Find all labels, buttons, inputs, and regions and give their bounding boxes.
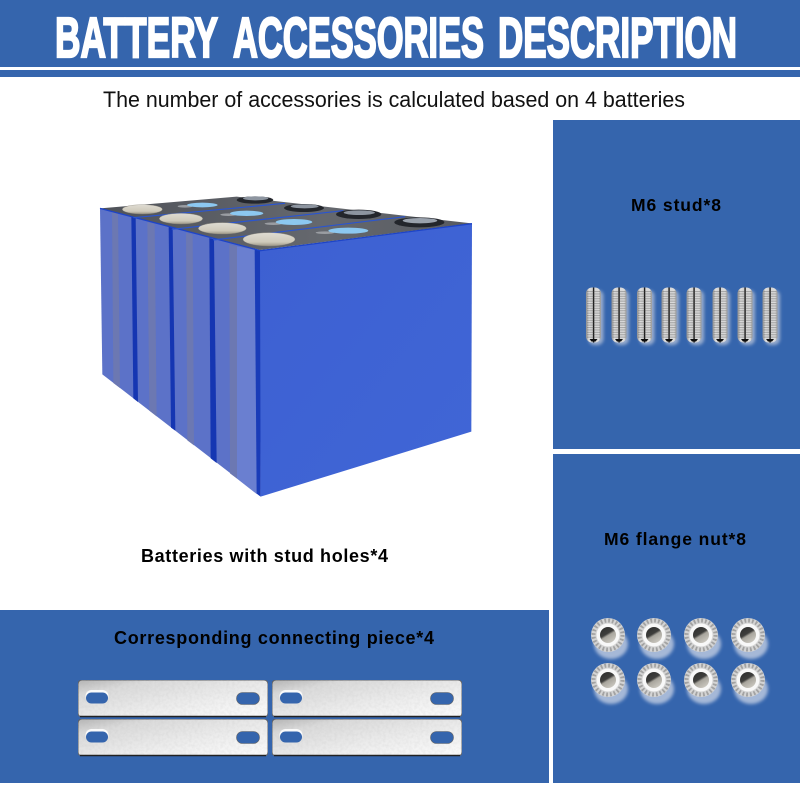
- panel: batteries: [100, 196, 472, 566]
- positive terminals: [122, 205, 295, 246]
- panel: connecting pieces: [0, 610, 549, 783]
- icon: eight flange nuts: [591, 618, 768, 704]
- title: BATTERY: [55, 6, 218, 70]
- subtitle: The number of accessories is calculated based on 4 batteries: [103, 87, 685, 112]
- battery top surface: [100, 197, 472, 250]
- label: batteries: Batteries with stud holes*4: [141, 546, 388, 566]
- panel: M6 stud: [553, 120, 800, 449]
- icon: four connecting plates: [78, 680, 462, 756]
- header band: [0, 0, 800, 77]
- vents: [178, 203, 368, 234]
- battery side faces: [100, 208, 261, 497]
- label: connecting pieces: Corresponding connecting piece*4: [114, 628, 434, 648]
- battery front face: [260, 223, 472, 497]
- negative terminals: [237, 196, 444, 227]
- title: ACCESSORIES: [233, 6, 484, 70]
- icon: eight studs: [586, 288, 780, 345]
- image: four battery cells: [100, 196, 472, 497]
- label: M6 flange nut: M6 flange nut*8: [604, 529, 746, 549]
- cell separator lines: [133, 203, 405, 240]
- label: M6 stud: M6 stud*8: [631, 195, 721, 215]
- panel: M6 flange nut: [553, 454, 800, 783]
